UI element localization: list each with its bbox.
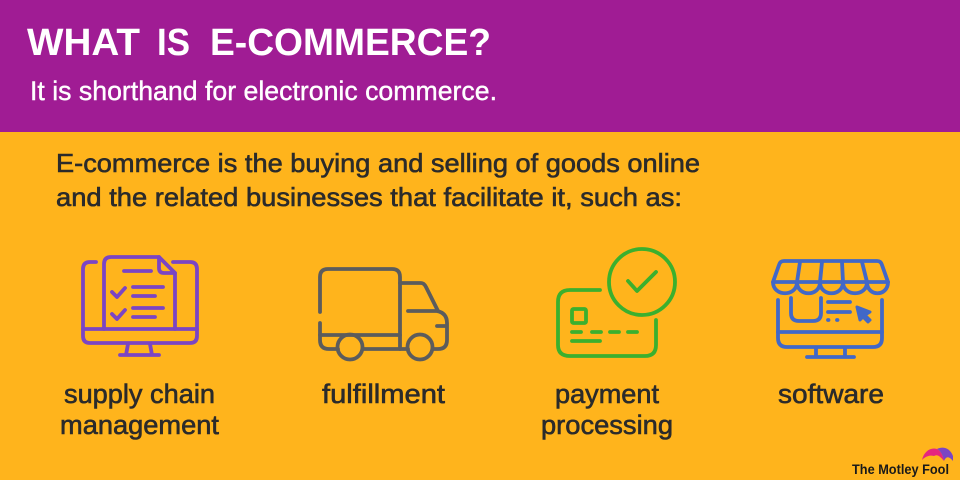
title	[27, 22, 491, 64]
title: WHAT	[27, 22, 140, 64]
label: supply chain management: management	[60, 410, 220, 440]
label: payment processing: payment	[555, 379, 660, 409]
intro text	[56, 148, 700, 212]
intro text: E-commerce is the buying and selling of goods online	[56, 148, 700, 178]
subtitle: It is shorthand for electronic commerce.	[30, 76, 497, 106]
label: payment processing: processing	[541, 410, 673, 440]
label: software: software	[778, 379, 884, 409]
icon: storefront software	[773, 261, 888, 357]
header band	[0, 0, 960, 132]
icon: jester hat	[922, 448, 953, 461]
icon: supply chain document on monitor	[83, 257, 197, 355]
label: fulfillment: fulfillment	[322, 379, 446, 409]
logo: The Motley Fool: The Motley Fool	[852, 461, 949, 477]
label: supply chain management	[60, 379, 220, 440]
intro text: and the related businesses that facilitate it, such as:	[56, 182, 682, 212]
label: payment processing	[541, 379, 673, 440]
title: E-COMMERCE?	[210, 22, 491, 64]
icon: credit card with checkmark	[558, 249, 675, 356]
icon: delivery truck	[320, 269, 447, 360]
label: supply chain management: supply chain	[64, 379, 215, 409]
logo: The Motley Fool	[852, 448, 953, 477]
title: IS	[157, 22, 190, 64]
